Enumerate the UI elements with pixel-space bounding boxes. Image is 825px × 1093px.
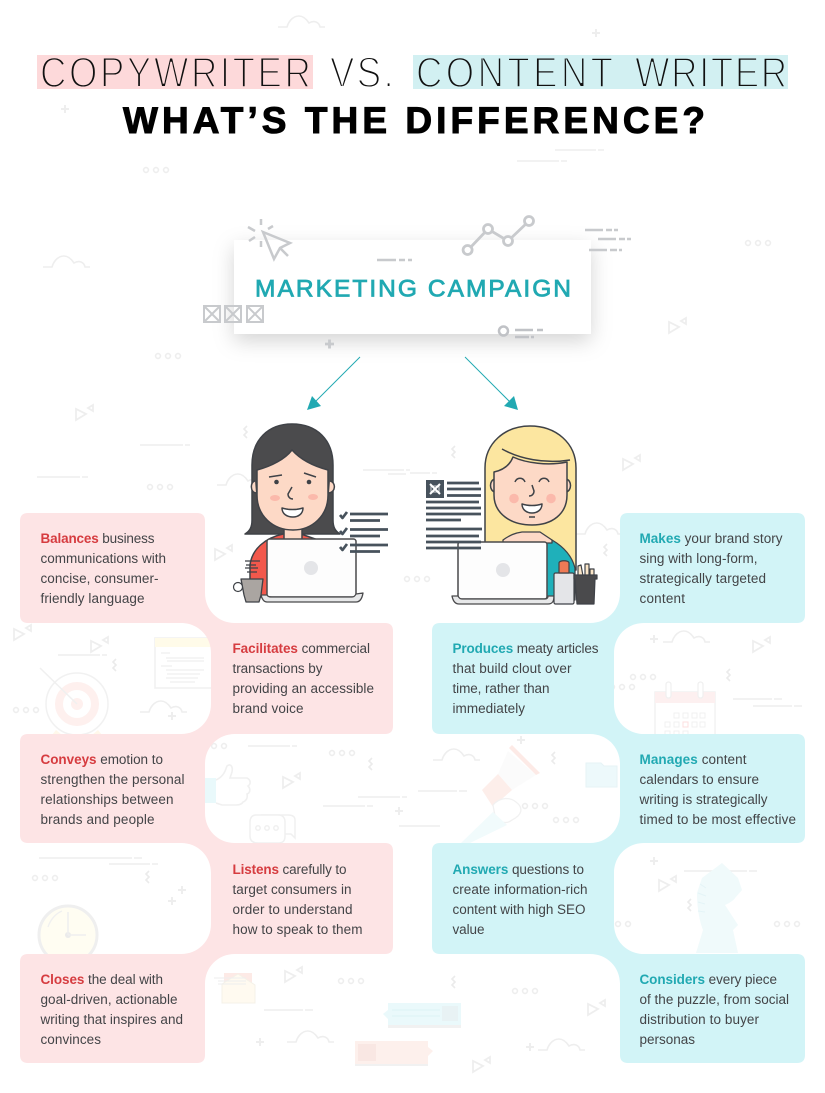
card heading: MARKETING CAMPAIGN: [255, 276, 571, 302]
text: considers: [640, 972, 789, 1047]
faint megaphone: [461, 745, 540, 843]
teal shirt: [540, 540, 575, 600]
text: considers: of the puzzle, from social: [640, 992, 789, 1007]
faint chess knight: [696, 863, 742, 953]
text: listens: target consumers in: [232, 882, 352, 897]
checklist: [340, 512, 388, 552]
text: manages: [638, 752, 796, 827]
icon: plus: [325, 340, 334, 348]
panel: content writer traits: [432, 513, 805, 1063]
highlight: copywriter: [37, 55, 313, 89]
pencil cup: [574, 564, 597, 604]
hair back: [485, 426, 576, 570]
faint code window: [155, 638, 215, 688]
text: conveys: relationships between: [40, 792, 174, 807]
text: listens: Listens carefully to: [232, 862, 346, 877]
text: makes: [640, 531, 783, 606]
title line 1: CONTENT: [416, 49, 613, 97]
arrow: to copywriter: [307, 357, 360, 410]
fringe line: [502, 449, 570, 461]
text: considers: distribution to buyer: [640, 1012, 760, 1027]
text: listens: how to speak to them: [232, 922, 362, 937]
text: conveys: strengthen the personal: [40, 772, 184, 787]
text: balances: [40, 531, 166, 606]
faint chat bubbles: [250, 815, 295, 843]
faint folder: [586, 763, 617, 787]
title line 1: VS.: [330, 49, 394, 97]
ears: [251, 481, 334, 493]
text: makes: strategically targeted: [640, 571, 766, 586]
highlight: content writer: [413, 55, 788, 89]
text: balances: communications with: [40, 551, 166, 566]
text: manages: writing is strategically: [638, 792, 768, 807]
text: produces: that build clout over: [452, 661, 572, 676]
text: closes: Closes the deal with: [40, 972, 163, 987]
text: makes: sing with long-form,: [640, 551, 758, 566]
icon: line chart: [463, 216, 534, 254]
text: facilitates: transactions by: [232, 661, 323, 676]
icon: image placeholders: [204, 306, 263, 322]
water bottle: [554, 561, 574, 604]
text: considers: personas: [640, 1032, 695, 1047]
hair back: [245, 424, 340, 534]
text: balances: Balances business: [40, 531, 155, 546]
coffee cup: [241, 579, 263, 602]
fingers: [245, 561, 260, 572]
text: closes: goal-driven, actionable: [40, 992, 178, 1007]
face features: [269, 473, 318, 517]
text: conveys: brands and people: [40, 812, 154, 827]
text: closes: convinces: [40, 1032, 101, 1047]
text: facilitates: [232, 641, 374, 716]
text: listens: order to understand: [232, 902, 352, 917]
faint clock: [39, 906, 97, 964]
face: [494, 457, 567, 525]
text: makes: content: [640, 591, 685, 606]
text: manages: Manages content: [640, 752, 747, 767]
faint books: [355, 1003, 461, 1066]
text: answers: create information-rich: [452, 882, 588, 897]
text: listens: [232, 862, 362, 937]
card: marketing campaign: [234, 240, 591, 334]
illustration: copywriter: [234, 424, 388, 602]
text: considers: Considers every piece: [640, 972, 777, 987]
face features: [509, 478, 556, 517]
icon: cursor click: [248, 219, 290, 259]
panel: copywriter traits: [20, 513, 393, 1063]
text: manages: calendars to ensure: [640, 772, 759, 787]
text: facilitates: Facilitates commercial: [232, 641, 370, 656]
arrow: to content writer: [465, 357, 518, 410]
text: produces: Produces meaty articles: [452, 641, 599, 656]
text: facilitates: brand voice: [232, 701, 304, 716]
text: conveys: [40, 752, 184, 827]
title line 2: WHAT’S THE DIFFERENCE?: [123, 100, 705, 141]
text: makes: Makes your brand story: [640, 531, 783, 546]
faint target: [40, 668, 108, 740]
title line 1: [37, 49, 788, 97]
text: conveys: Conveys emotion to: [40, 752, 163, 767]
text: answers: value: [452, 922, 484, 937]
text: answers: Answers questions to: [452, 862, 584, 877]
text: balances: friendly language: [40, 591, 144, 606]
text: closes: writing that inspires and: [40, 1012, 183, 1027]
ears: [490, 479, 570, 492]
text: balances: concise, consumer-: [40, 571, 158, 586]
title line 1: COPYWRITER: [40, 49, 311, 97]
illustration: content writer: [426, 426, 597, 604]
text: produces: time, rather than: [452, 681, 550, 696]
icon: bullet list: [499, 326, 543, 337]
text: facilitates: providing an accessible: [232, 681, 374, 696]
text: manages: timed to be most effective: [640, 812, 796, 827]
faint calendar: [655, 682, 715, 742]
title line 1: WRITER: [635, 49, 787, 97]
laptop: [458, 542, 547, 599]
text: produces: immediately: [452, 701, 525, 716]
laptop: [267, 539, 356, 597]
face: [257, 450, 328, 530]
document: [426, 480, 482, 548]
text: answers: content with high SEO: [452, 902, 586, 917]
neck and shirt: [250, 534, 318, 597]
text: answers: [452, 862, 588, 937]
faint thumbs up: [205, 765, 250, 805]
text: produces: [452, 641, 599, 716]
text: closes: [40, 972, 183, 1047]
icon: text dashes: [377, 230, 631, 260]
faint envelope: [214, 973, 255, 1003]
